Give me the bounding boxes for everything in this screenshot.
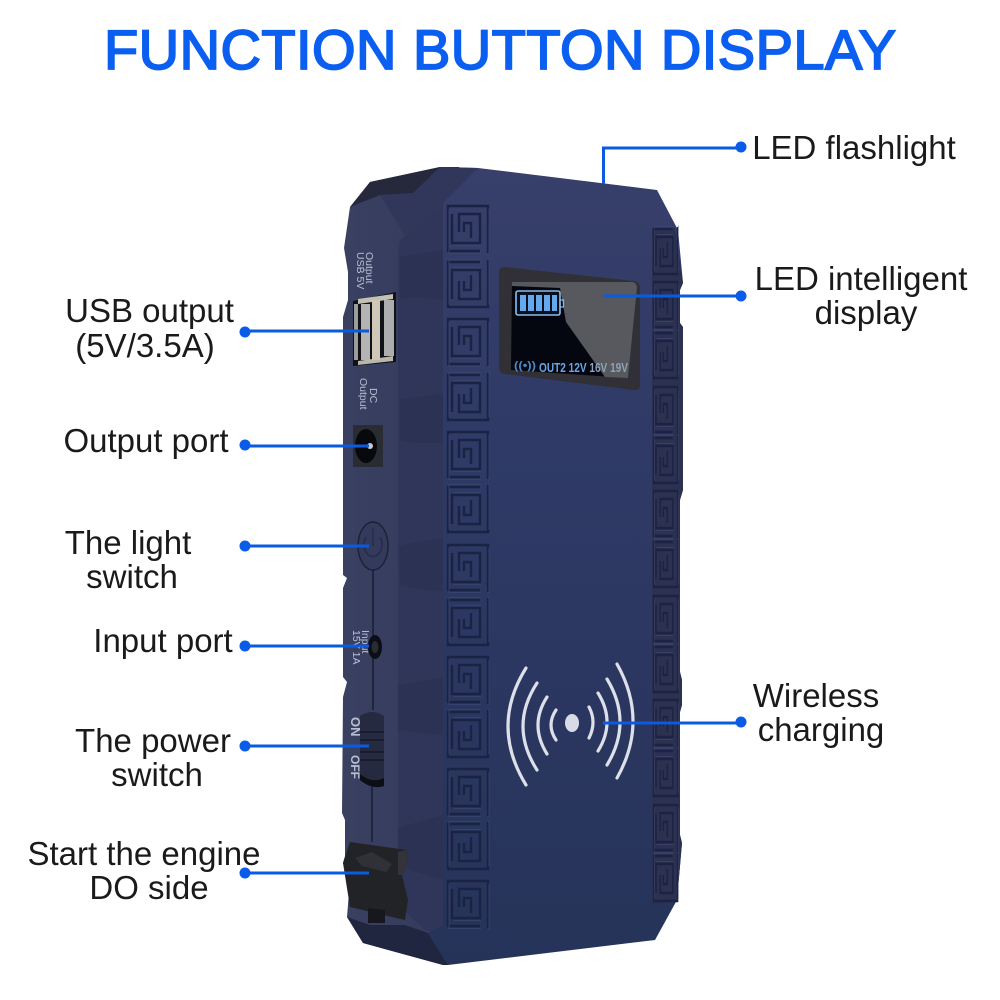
LCD display [499,267,640,390]
leader: power switch [240,740,369,752]
seam line [372,570,373,842]
ridge notch 2 [400,393,444,443]
label: power switch: The power [75,722,231,759]
device bottom dark edge [347,917,448,965]
ridge notch 5 [398,815,444,880]
left meander column [448,206,489,930]
device top dark edge [350,167,460,207]
USB port [353,292,396,366]
side label: dc output [357,378,379,410]
side label: output usb 5v: USB 5V [354,252,366,289]
side label: input 15v 1a [350,630,371,664]
label: input port: Input port [93,622,233,659]
label: wireless charging: Wireless [753,677,879,714]
side ridge [398,205,445,935]
label: USB output: (5V/3.5A) [75,327,215,364]
input port [368,635,382,659]
label: LED intelligent display: LED intelligent [755,260,967,297]
ridge notch 3 [399,538,444,592]
power switch [360,712,384,787]
DC output port [353,425,383,467]
side label: input 15v 1a: 15V 1A [350,630,362,664]
right band shading [652,228,683,905]
leader: LED display [603,290,746,302]
ridge notch 4 [398,677,444,735]
wireless charging symbol [508,664,633,785]
label: power switch: switch [111,756,203,793]
side label: dc output: DC [367,388,379,404]
product: jump starter power bank [342,167,683,965]
label: USB output: USB output [65,292,234,329]
engine start clamp cover [343,842,408,923]
device side body [342,167,478,965]
title: FUNCTION BUTTON DISPLAY [104,18,896,81]
leader: input port [240,640,369,652]
ridge notch 1 [400,250,444,300]
side label: output usb 5v: Output [363,252,375,284]
label: output port: Output port [63,422,229,459]
screen glare [512,282,637,378]
side label: on: ON [348,717,363,736]
top chamfer [380,167,478,235]
side label: output usb 5v [354,252,375,289]
leader: start engine [240,868,369,878]
leader: output port [240,440,369,450]
leader: LED flashlight [604,142,746,184]
device front face [428,168,683,965]
side label: off: OFF [348,755,362,779]
display screen [511,282,637,378]
label: wireless charging: charging [758,711,884,748]
side label: input 15v 1a: Input [359,630,371,653]
label: light switch: The light [65,524,191,561]
right meander column [654,225,678,901]
wireless symbol on screen: ((•)) [514,360,536,372]
leader: light switch [240,540,369,552]
screen text: OUT2 12V 16V 19V [539,360,628,375]
label: start the engine: Start the engine [28,835,260,872]
side label: dc output: Output [357,378,369,410]
leader: wireless charging [603,716,746,728]
leader: USB output [240,326,369,338]
label: start the engine: DO side [89,869,209,906]
label: LED intelligent display: display [815,294,918,331]
label: light switch: switch [86,558,178,595]
label: LED flashlight: LED flashlight [752,129,956,166]
display bezel [499,267,640,390]
light switch button [358,522,388,570]
battery icon [516,291,564,315]
